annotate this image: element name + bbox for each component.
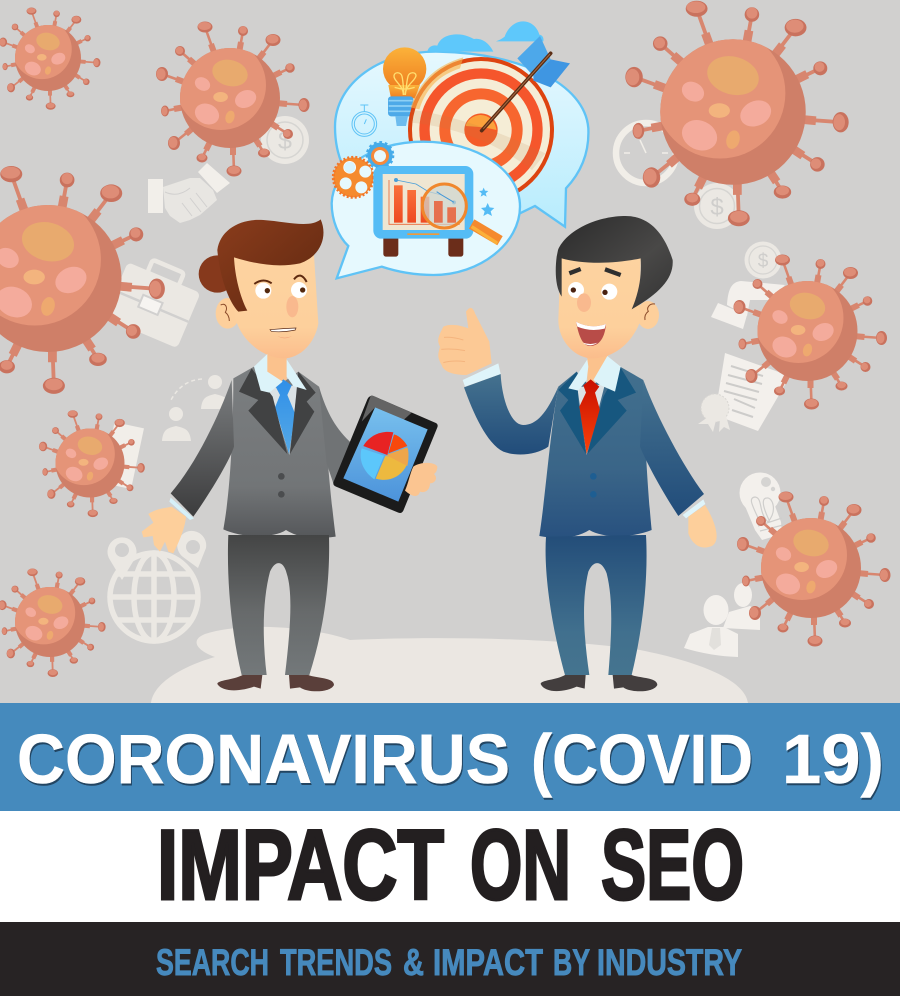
icon: stopwatch bbox=[352, 105, 377, 136]
icon: stars bbox=[479, 188, 494, 216]
collar bbox=[254, 354, 307, 393]
eyes and brows bbox=[254, 276, 307, 299]
nose bbox=[286, 296, 298, 317]
icon: coin upper right bbox=[744, 242, 782, 278]
icon: arrow bbox=[482, 36, 570, 131]
hair bbox=[217, 219, 323, 312]
background panel bbox=[0, 0, 900, 703]
shirt front and tie bbox=[268, 379, 298, 455]
viruses bbox=[0, 1, 891, 677]
icon: clock bbox=[616, 123, 676, 183]
subtitle: TRENDS bbox=[280, 942, 392, 983]
icon: magnifying glass bbox=[422, 184, 500, 243]
icon: globe with pins bbox=[108, 531, 206, 641]
title: coronavirus bbox=[17, 720, 884, 798]
collar bbox=[568, 356, 621, 392]
icon: dollar coin bbox=[261, 116, 309, 164]
virus middle left bbox=[39, 410, 145, 517]
virus right lower bbox=[737, 492, 890, 646]
hand on tablet bbox=[405, 463, 437, 496]
mouth bbox=[270, 328, 296, 338]
title: coronavirus: (COVID bbox=[531, 720, 753, 798]
title: coronavirus: CORONAVIRUS bbox=[17, 720, 510, 798]
subtitle: BY bbox=[553, 942, 590, 983]
icon: certificate bbox=[698, 353, 790, 432]
right ear bbox=[637, 301, 659, 329]
icon: light bulb bbox=[383, 47, 426, 126]
right sleeve bbox=[319, 387, 352, 483]
right businessman bbox=[438, 216, 717, 691]
jacket buttons bbox=[278, 473, 285, 498]
icon: briefcase bbox=[104, 251, 205, 348]
open mouth bbox=[576, 322, 606, 346]
raised arm bbox=[464, 374, 558, 454]
lapels bbox=[239, 368, 316, 454]
subtitle: & bbox=[403, 942, 424, 983]
hair bbox=[556, 216, 673, 309]
subtitle bbox=[156, 942, 742, 983]
icon: coin upper right: $ bbox=[758, 251, 769, 272]
front speech bubble bbox=[332, 142, 520, 278]
jacket bbox=[223, 367, 336, 538]
icon: chart board bbox=[373, 166, 473, 257]
heading: impact on seo bbox=[157, 809, 744, 920]
title: coronavirus: 19) bbox=[782, 720, 884, 798]
icon: lightbulb bbox=[740, 472, 783, 540]
icon: document left bbox=[102, 422, 144, 489]
virus right middle bbox=[734, 254, 887, 410]
subtitle: INDUSTRY bbox=[597, 942, 742, 983]
shoes bbox=[217, 675, 334, 691]
icon: people exchange bbox=[162, 375, 230, 441]
icon: target bbox=[408, 57, 554, 203]
white band bbox=[0, 811, 900, 922]
shirt front and red tie bbox=[577, 379, 605, 455]
icon: stamp hand bbox=[711, 281, 785, 329]
shoes bbox=[541, 675, 657, 691]
neck bbox=[267, 347, 287, 382]
left sleeve bbox=[171, 380, 234, 517]
back speech bubble bbox=[335, 52, 588, 227]
virus top right bbox=[625, 1, 849, 226]
virus lower left bbox=[0, 568, 106, 677]
icon: orange gear bbox=[333, 157, 373, 197]
eyes and brows bbox=[568, 269, 621, 300]
pie chart bbox=[361, 432, 408, 480]
trousers bbox=[228, 535, 329, 675]
lapels bbox=[558, 367, 636, 454]
dark band bbox=[0, 922, 900, 996]
tablet bbox=[333, 396, 438, 513]
heading: impact on seo: ON bbox=[470, 809, 571, 920]
right arm bbox=[640, 380, 704, 516]
face bbox=[232, 255, 318, 358]
background business icons bbox=[102, 116, 790, 657]
face bbox=[558, 255, 641, 358]
icon: handshake bbox=[148, 163, 230, 223]
virus top centre left bbox=[156, 22, 310, 176]
title band bbox=[0, 703, 900, 811]
virus left large bbox=[0, 166, 165, 394]
icon: dollar coin: $ bbox=[278, 127, 292, 155]
icon: business people bbox=[684, 583, 760, 657]
icon: coin right bbox=[694, 183, 740, 229]
clouds bbox=[427, 21, 543, 52]
right hand bbox=[683, 499, 717, 548]
hair bun bbox=[199, 255, 236, 293]
heading: impact on seo: SEO bbox=[601, 809, 744, 920]
icon: blue gear bbox=[367, 143, 393, 168]
speech bubbles with icons bbox=[332, 21, 588, 278]
ground bbox=[151, 627, 748, 703]
icon: coin right: $ bbox=[710, 194, 724, 221]
virus top left bbox=[0, 8, 100, 110]
subtitle: IMPACT bbox=[433, 942, 543, 983]
jacket buttons bbox=[590, 473, 597, 498]
left ear bbox=[216, 298, 240, 329]
jacket bbox=[539, 367, 652, 538]
subtitle: SEARCH bbox=[156, 942, 269, 983]
neck bbox=[587, 347, 608, 382]
left hand bbox=[142, 498, 194, 553]
left businessman bbox=[142, 219, 438, 691]
nose bbox=[577, 293, 591, 312]
heading: impact on seo: IMPACT bbox=[157, 809, 444, 920]
thumbs-up hand bbox=[438, 308, 501, 387]
trousers bbox=[546, 535, 647, 675]
